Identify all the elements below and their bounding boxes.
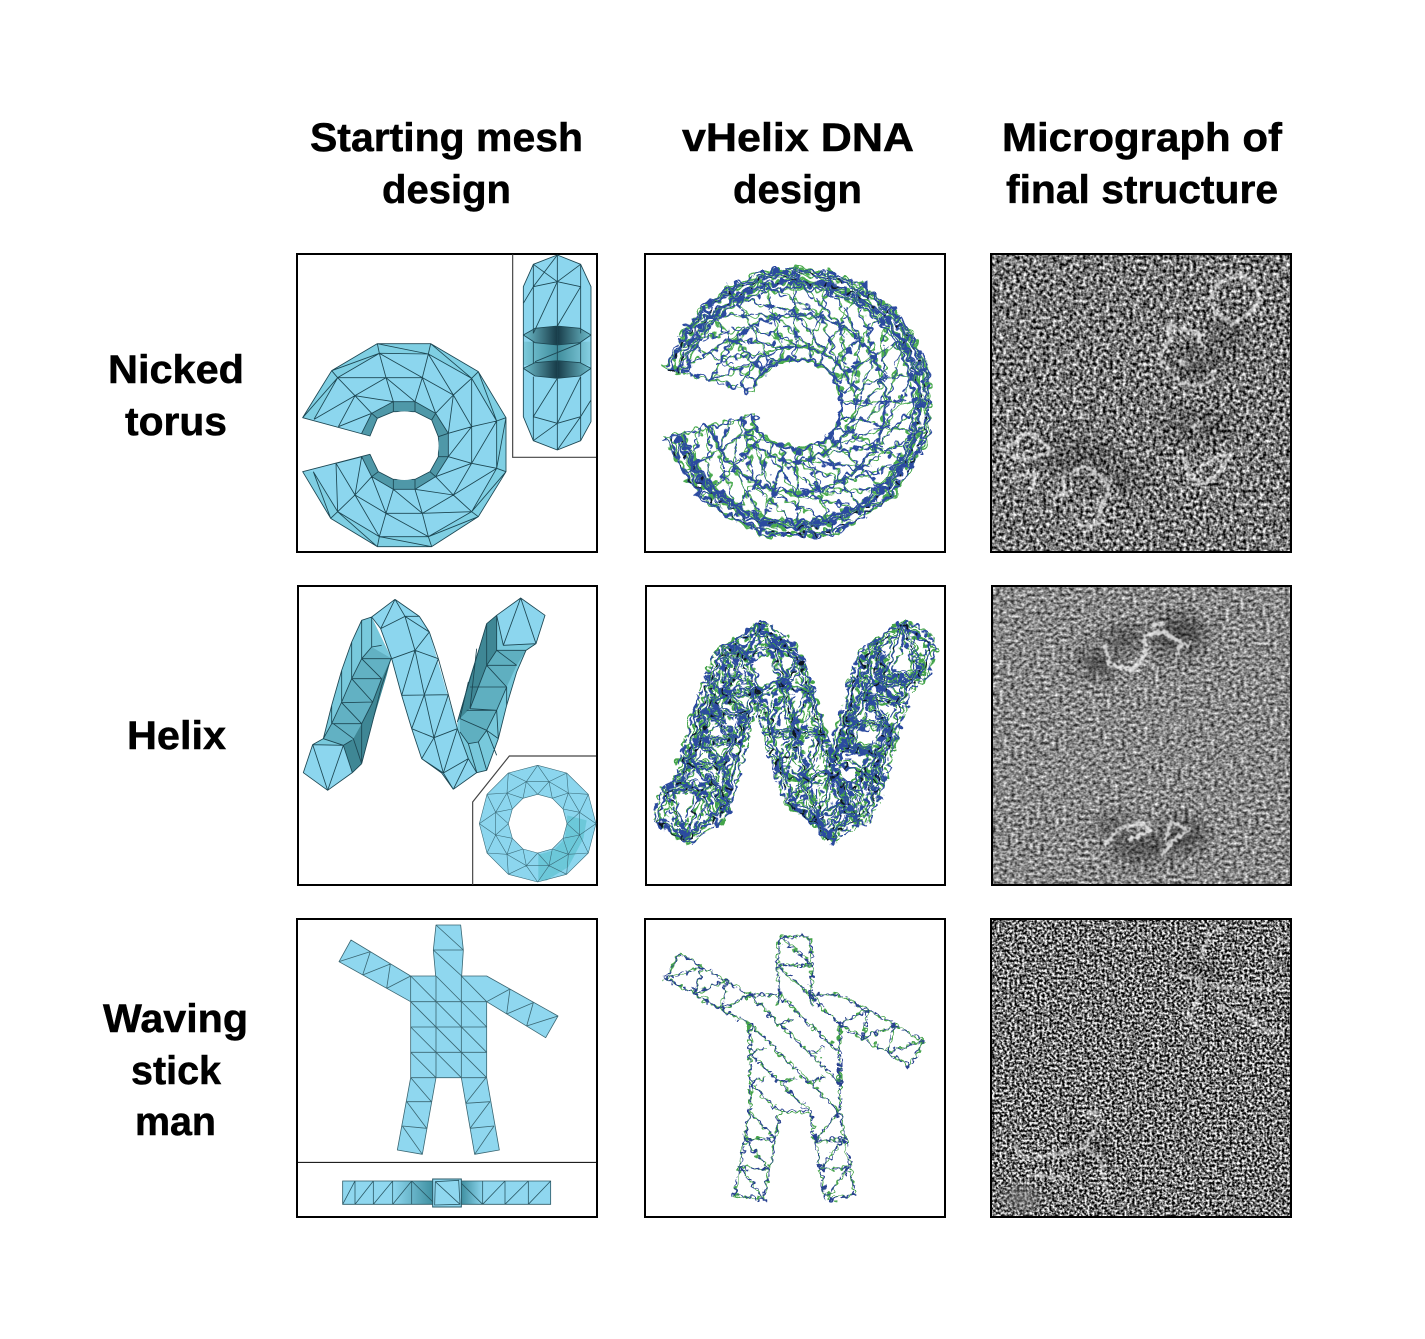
bright structures xyxy=(1105,624,1192,855)
dark staining xyxy=(1035,313,1248,493)
mesh: helix ribbon xyxy=(303,598,545,790)
bright structures xyxy=(1015,928,1288,1198)
DNA strands: green xyxy=(637,243,957,563)
column heading: micrograph of final structure: Micrograph of xyxy=(1002,116,1283,160)
panel: helix DNA design xyxy=(646,586,945,885)
inset: torus side view xyxy=(523,255,591,450)
panel: stick man micrograph xyxy=(991,919,1291,1217)
bright structures xyxy=(1002,273,1262,527)
panel: stick man DNA design xyxy=(645,919,945,1217)
column heading: micrograph of final structure: final structure xyxy=(1006,168,1278,212)
row label: nicked torus xyxy=(108,348,244,444)
DNA strands: blue xyxy=(652,620,936,844)
column heading: starting mesh design: Starting mesh xyxy=(310,116,583,160)
DNA strands: blue xyxy=(637,243,957,563)
panel: nicked torus DNA design xyxy=(637,243,957,563)
panel: helix mesh xyxy=(298,586,597,885)
inset: helix top view xyxy=(479,765,596,882)
row label: waving stick man xyxy=(103,997,248,1144)
row label: waving stick man: stick xyxy=(131,1049,222,1093)
column heading: starting mesh design xyxy=(310,116,583,212)
column heading: vHelix DNA design: design xyxy=(733,168,862,212)
row label: nicked torus: torus xyxy=(125,400,227,444)
inset: stick man side view xyxy=(343,1179,551,1207)
inset divider xyxy=(297,1161,596,1164)
DNA strands: blue xyxy=(666,937,924,1200)
row label: helix: Helix xyxy=(127,714,226,758)
row label: waving stick man: Waving xyxy=(103,997,248,1041)
gray smear xyxy=(1002,1186,1042,1210)
column heading: starting mesh design: design xyxy=(382,168,511,212)
dark staining xyxy=(1078,615,1205,860)
column heading: vHelix DNA design: vHelix DNA xyxy=(682,116,914,160)
panel: nicked torus micrograph xyxy=(991,254,1291,552)
DNA strands: green xyxy=(652,620,936,844)
panel: stick man mesh xyxy=(297,919,597,1217)
mesh: torus face xyxy=(303,344,506,547)
DNA strands: green xyxy=(666,937,924,1200)
DNA base speckle xyxy=(671,274,927,534)
column heading: micrograph of final structure xyxy=(1002,116,1283,212)
inset frame xyxy=(513,254,596,457)
DNA base speckle xyxy=(657,625,931,841)
panel: helix micrograph xyxy=(992,586,1291,885)
panel: nicked torus mesh xyxy=(297,254,597,552)
row label: nicked torus: Nicked xyxy=(108,348,244,392)
inset frame xyxy=(473,756,596,885)
column heading: vHelix DNA design xyxy=(682,116,914,212)
dark staining xyxy=(1072,958,1222,1162)
row label: waving stick man: man xyxy=(135,1100,216,1144)
mesh: stick man front view xyxy=(339,925,558,1154)
